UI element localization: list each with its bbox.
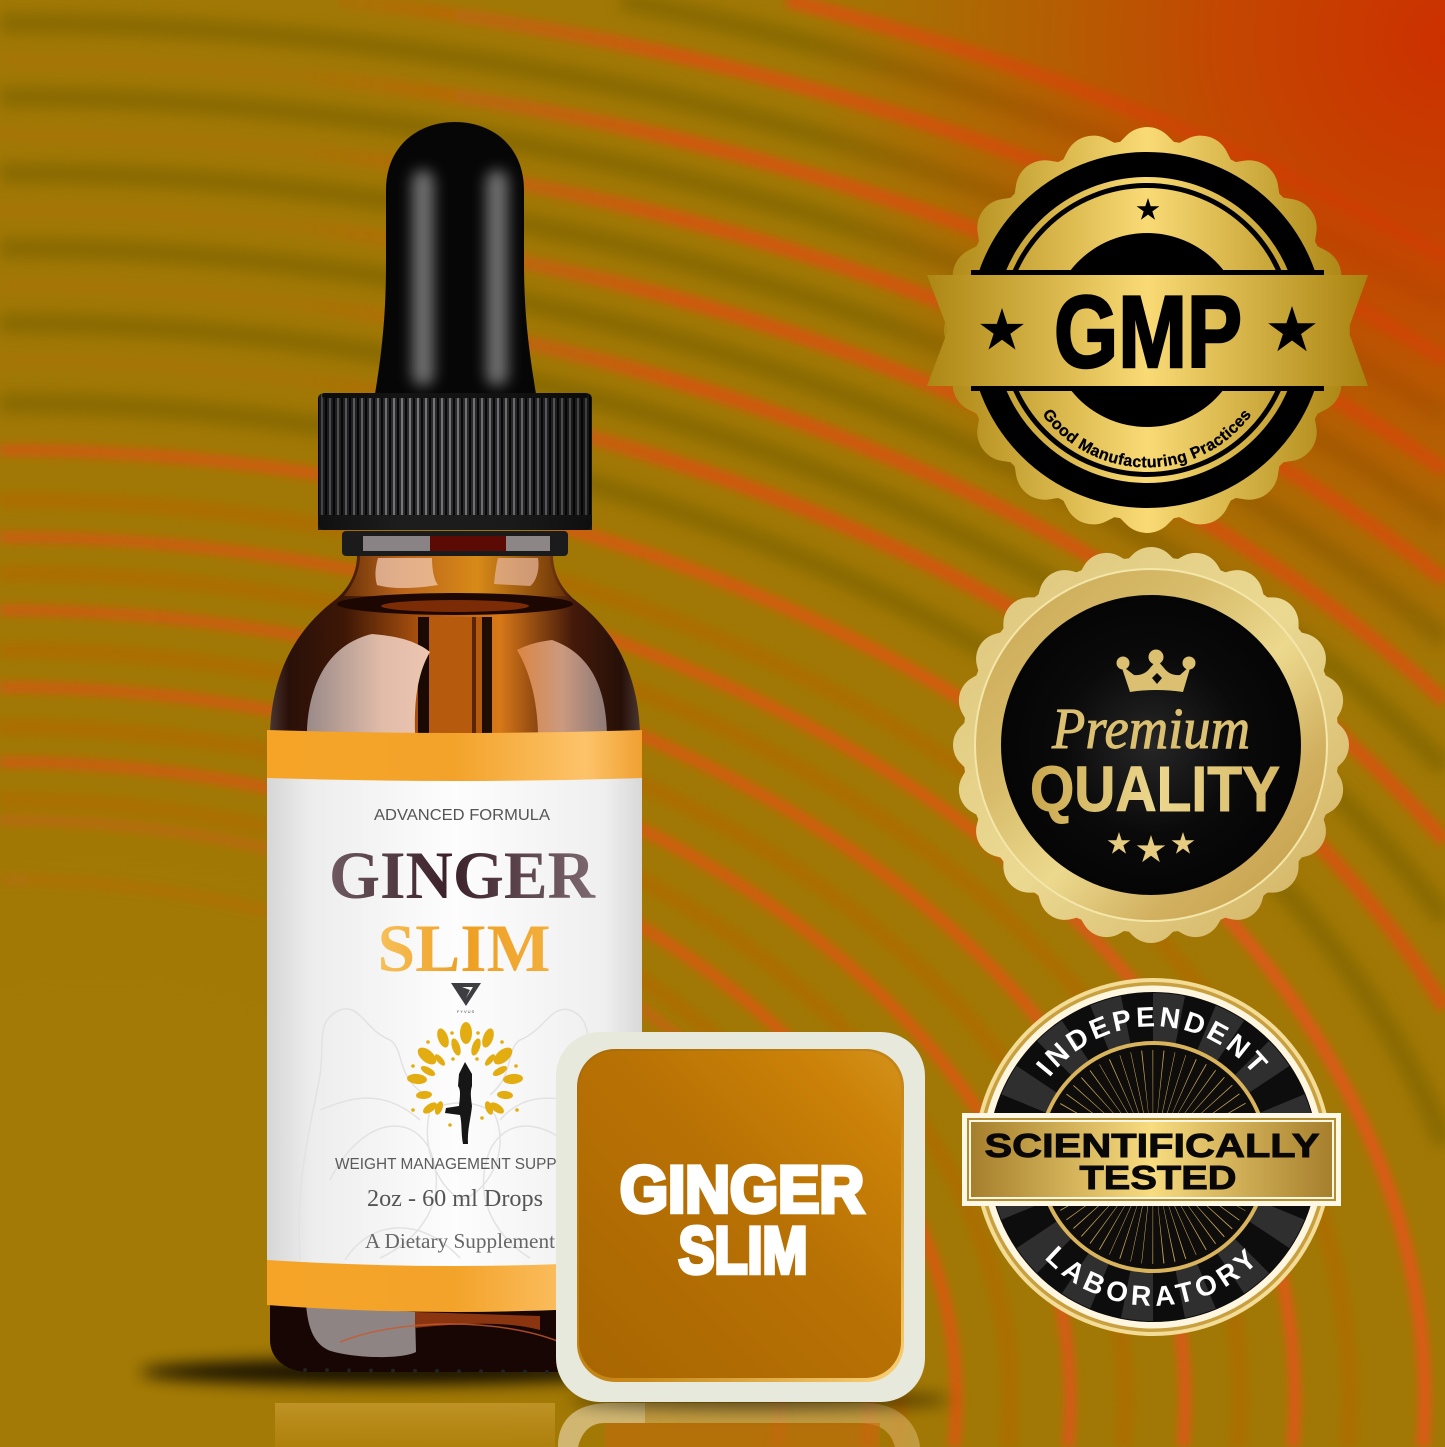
base glass bbox=[270, 1300, 640, 1372]
neck highlights bbox=[375, 558, 438, 588]
right highlight bbox=[517, 640, 607, 733]
QUALITY: QUALITY bbox=[1030, 753, 1280, 825]
banner bbox=[962, 1113, 1341, 1206]
left highlight bbox=[307, 634, 430, 733]
outer rings bbox=[974, 978, 1332, 1336]
square gummy container bbox=[556, 1032, 925, 1402]
glass shoulder bbox=[270, 555, 640, 733]
Premium script: Premium bbox=[1051, 696, 1250, 761]
ribbed cap bbox=[318, 393, 592, 530]
liquid level bbox=[337, 593, 573, 615]
floor reflection bbox=[275, 1403, 920, 1447]
label text: dietary supplement: A Dietary Supplement bbox=[365, 1229, 555, 1253]
bottom label band bbox=[267, 1260, 642, 1312]
badge: premium quality bbox=[945, 540, 1357, 952]
scalloped gold seal bbox=[945, 540, 1357, 952]
glass neck upper reflection bbox=[344, 556, 566, 596]
white label bbox=[267, 770, 642, 1270]
badge: independent laboratory bbox=[962, 978, 1341, 1336]
stars row bbox=[1108, 832, 1194, 862]
badge: GMP bbox=[927, 127, 1368, 533]
brand logo: FYVUS bbox=[457, 1009, 475, 1014]
LABORATORY arc text: LABORATORY bbox=[1045, 1246, 1253, 1306]
label text: volume: 2oz - 60 ml Drops bbox=[367, 1186, 543, 1212]
bottle shadow bbox=[140, 1359, 630, 1385]
INDEPENDENT arc text: INDEPENDENT bbox=[1036, 1007, 1269, 1076]
left star bbox=[980, 308, 1024, 350]
yoga emblem with leaves bbox=[407, 1022, 523, 1144]
label text: Ginger: GINGER bbox=[329, 837, 596, 913]
top label band bbox=[267, 730, 642, 781]
scalloped gold seal bbox=[940, 120, 1354, 540]
container text: Slim: SLIM bbox=[678, 1213, 808, 1287]
top star bbox=[1137, 198, 1159, 220]
gold rings bbox=[975, 569, 1327, 921]
ribbon bbox=[927, 275, 1368, 386]
faint ginger line art bbox=[299, 1009, 613, 1260]
label text: Slim: SLIM bbox=[378, 910, 550, 986]
curved caption: Good Manufacturing Practices bbox=[1044, 410, 1250, 468]
label text: weight management: WEIGHT MANAGEMENT SUPPLEMENT bbox=[335, 1156, 620, 1173]
SCIENTIFICALLY: SCIENTIFICALLY bbox=[984, 1127, 1320, 1164]
segmented band bbox=[1013, 1017, 1293, 1297]
dropper rubber bulb bbox=[375, 122, 536, 394]
yoga figure bbox=[445, 1062, 472, 1144]
jar shadow bbox=[570, 1391, 950, 1409]
neck ring bbox=[342, 531, 568, 556]
container text: Ginger: GINGER bbox=[620, 1152, 864, 1226]
black disc bbox=[1001, 595, 1301, 895]
GMP text: GMP bbox=[1054, 275, 1242, 389]
dropper bottle bbox=[267, 122, 642, 1372]
right star bbox=[1268, 306, 1316, 351]
ribbon shadow bbox=[971, 270, 1324, 391]
TESTED: TESTED bbox=[1080, 1159, 1236, 1196]
black rings bbox=[982, 164, 1312, 496]
crown bbox=[1116, 650, 1196, 692]
label text: advanced formula: ADVANCED FORMULA bbox=[374, 807, 550, 824]
inner tube bbox=[418, 617, 492, 733]
brand logo bbox=[451, 983, 481, 1014]
inner starburst disc bbox=[1039, 1043, 1267, 1271]
